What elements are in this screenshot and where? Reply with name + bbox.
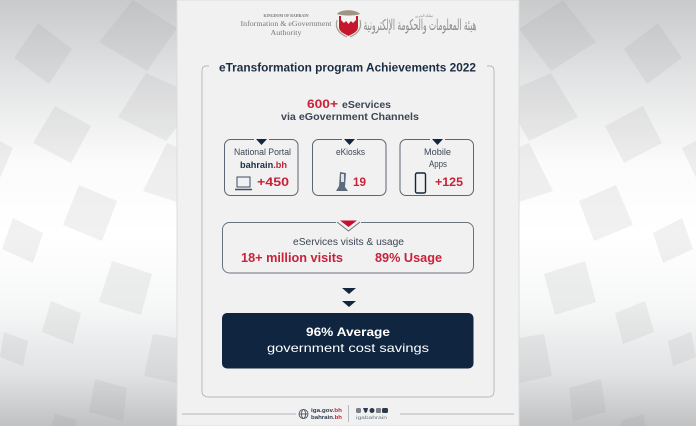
panel: visits and usage: 89% Usage: [375, 251, 442, 265]
arabic calligraphy: [364, 13, 477, 34]
authority name: Information & eGovernment: [240, 19, 333, 28]
callout: cost savings: [222, 313, 474, 368]
card: eKiosks: [312, 137, 386, 196]
arabic calligraphy: هيئة المعلومات والحكومة الإلكترونية: [364, 16, 477, 34]
icon: globe: [299, 410, 308, 418]
title: eTransformation program Achievements 2022: [219, 60, 476, 74]
website links: bahrain .bh: [311, 415, 343, 421]
heading: 600+ eServices: 600+: [307, 97, 338, 111]
icon: phone: [416, 173, 426, 193]
card: National Portal: [224, 137, 298, 196]
panel: visits and usage: 18+ million visits: [241, 251, 343, 265]
card: Mobile Apps: Apps: [429, 159, 447, 169]
card: eKiosks: 19: [353, 177, 366, 189]
footer: [182, 405, 514, 422]
card: Mobile Apps: Mobile: [424, 147, 451, 157]
card: National Portal: +450: [257, 177, 289, 189]
arabic calligraphy: مملكة البحرين: [415, 13, 433, 18]
heading: 600+ eServices: eServices: [342, 99, 391, 111]
heading: 600+ eServices: via eGovernment Channels: [281, 111, 419, 123]
social icons: [356, 408, 388, 413]
card: eKiosks: eKiosks: [336, 147, 365, 157]
authority name: KINGDOM OF BAHRAIN: [264, 14, 309, 18]
card: National Portal: National Portal: [234, 147, 291, 157]
header logo: [240, 10, 477, 37]
center panel: [177, 0, 519, 426]
social handle: igabahrain: [356, 415, 388, 420]
icon: kiosk: [336, 172, 348, 191]
website links: [311, 408, 343, 421]
authority name: [240, 14, 333, 37]
panel: visits and usage: [222, 220, 474, 273]
card: Mobile Apps: +125: [435, 177, 464, 189]
card: Mobile Apps: [400, 137, 474, 196]
authority name: Authority: [270, 28, 302, 37]
arrows: [342, 288, 356, 307]
icon: Bahrain emblem: [336, 10, 361, 37]
callout: cost savings: 96% Average: [306, 325, 390, 339]
panel: visits and usage: eServices visits & usage: [293, 237, 404, 248]
heading: 600+ eServices: [281, 97, 419, 123]
callout: cost savings: government cost savings: [267, 341, 429, 355]
red notch: [337, 220, 360, 231]
website links: iga.gov .bh: [311, 408, 343, 414]
card: National Portal: bahrain.bh: [240, 160, 287, 171]
icon: laptop: [235, 177, 252, 190]
main frame: [202, 66, 494, 397]
